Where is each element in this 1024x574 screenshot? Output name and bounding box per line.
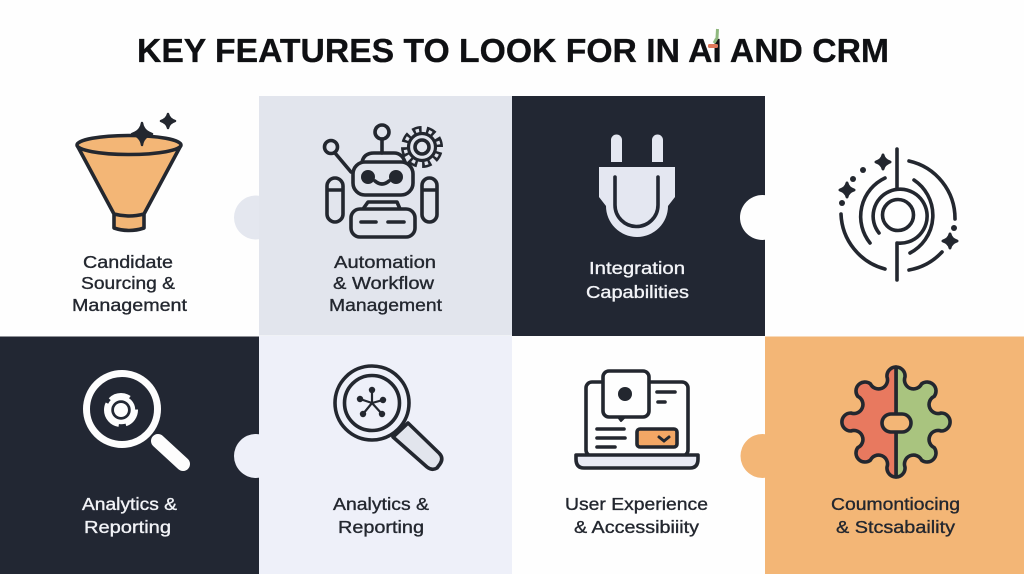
label: automation and workflow: Automation	[334, 252, 436, 272]
label: analytics and reporting dark: Reporting	[84, 517, 171, 537]
panel: puzzle gear	[740, 336, 1024, 574]
label: analytics and reporting light: Reporting	[338, 517, 424, 537]
label: analytics and reporting dark	[82, 494, 177, 537]
label: candidate sourcing: Management	[72, 295, 187, 315]
panel: circular icon tile	[740, 96, 1024, 336]
label: puzzle gear	[831, 494, 960, 537]
panel: automation and workflow	[234, 96, 512, 336]
icon: robot	[324, 124, 445, 237]
icon: laptop	[576, 371, 698, 468]
label: analytics and reporting dark: Analytics &	[82, 494, 177, 514]
label: candidate sourcing	[72, 252, 187, 315]
icon: funnel	[77, 114, 181, 230]
panel: integration capabilities	[512, 96, 765, 336]
icon: concentric rings	[839, 149, 957, 280]
label: integration capabilities: Capabilities	[586, 282, 689, 302]
panel: candidate sourcing	[0, 96, 259, 336]
title: KEY FEATURES TO LOOK FOR IN AI AND CRM	[137, 32, 889, 69]
label: automation and workflow	[329, 252, 442, 315]
label: candidate sourcing: Sourcing &	[81, 273, 175, 293]
label: integration capabilities: Integration	[589, 258, 685, 278]
panel: user experience	[512, 336, 765, 574]
label: analytics and reporting light	[333, 494, 429, 537]
label: puzzle gear: & Stcsabaility	[836, 517, 955, 537]
label: analytics and reporting light: Analytics &	[333, 494, 429, 514]
label: user experience: & Accessibiiity	[574, 517, 699, 537]
icon: split puzzle gear	[842, 367, 950, 477]
label: user experience	[565, 494, 708, 537]
panel: analytics and reporting dark	[0, 336, 259, 574]
label: user experience: User Experience	[565, 494, 708, 514]
label: candidate sourcing: Candidate	[83, 252, 173, 272]
label: automation and workflow: Management	[329, 295, 442, 315]
label: automation and workflow: & Workflow	[333, 273, 434, 293]
icon: plug	[599, 134, 675, 237]
icon: magnifier with gear	[86, 374, 183, 464]
label: puzzle gear: Coumontiocing	[831, 494, 960, 514]
icon: magnifier with network	[335, 366, 442, 469]
label: integration capabilities	[586, 258, 689, 302]
panel: analytics and reporting light	[234, 336, 512, 574]
